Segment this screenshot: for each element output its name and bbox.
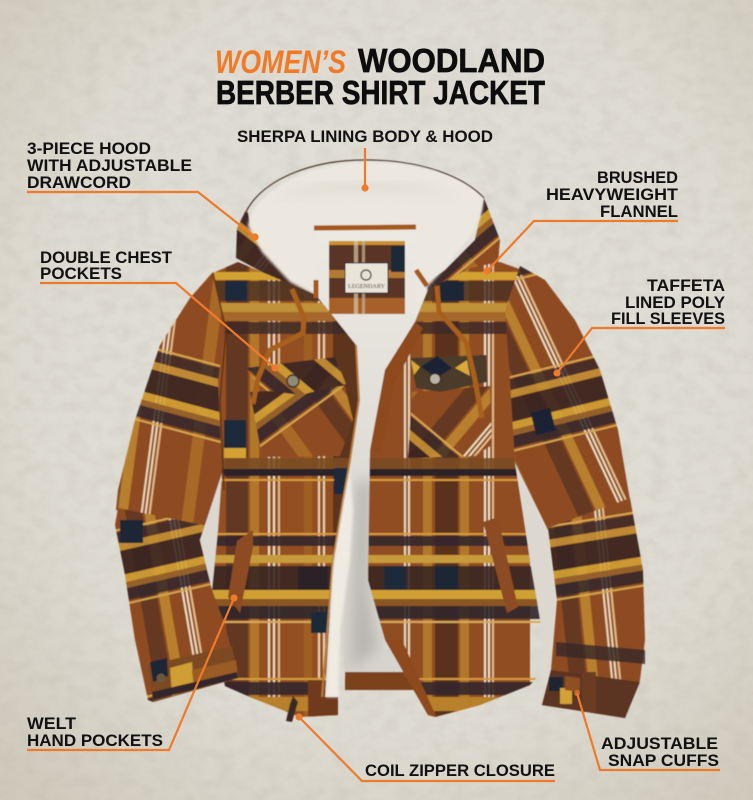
left placket edge: [322, 345, 359, 697]
right sleeve navy check: [531, 408, 556, 435]
right cuff: [542, 670, 640, 718]
sherpa hood lining: [248, 162, 483, 320]
bottom lining band: [345, 672, 420, 690]
callout: sleeves: FILL SLEEVES: [611, 309, 725, 328]
right sleeve upper: [505, 266, 630, 530]
right sleeve lower: [542, 498, 645, 718]
callout: zipper: COIL ZIPPER CLOSURE: [365, 761, 555, 780]
right body panel: [368, 261, 542, 718]
callout: sleeves: TAFFETA: [647, 276, 725, 295]
callout: hood: DRAWCORD: [27, 173, 131, 192]
hanger loop: [314, 227, 416, 228]
callout: flannel: FLANNEL: [600, 202, 678, 221]
callout: cuffs: [574, 690, 720, 770]
callout: hood: WITH ADJUSTABLE: [27, 156, 192, 175]
callout: sleeves: LINED POLY: [625, 293, 726, 312]
left drawcord: [253, 289, 304, 404]
right sleeve lower bands: [556, 642, 645, 664]
zipper pull: [286, 696, 298, 722]
callout: chest pockets: DOUBLE CHEST: [40, 248, 173, 267]
right chest pocket: [408, 355, 492, 458]
callout: cuffs: ADJUSTABLE: [601, 734, 718, 753]
body lining: [316, 232, 420, 680]
callout: sleeves: [553, 276, 726, 377]
left welt pocket: [228, 530, 253, 613]
callout: flannel: BRUSHED: [597, 168, 678, 187]
left sleeve navy check: [120, 520, 143, 543]
sleeve-body gap left: [200, 473, 222, 590]
hood shell left: [236, 208, 318, 298]
callout: chest pockets: [40, 248, 279, 372]
neck patch: [329, 241, 405, 314]
callout: sherpa lining: SHERPA LINING BODY & HOOD: [237, 127, 493, 146]
collar cord ends: [316, 270, 427, 298]
shoulder seam left: [213, 273, 226, 490]
hood top edge: [246, 160, 484, 212]
callout: zipper: [295, 713, 555, 781]
callout: chest pockets: POCKETS: [40, 264, 122, 283]
title: BERBER SHIRT JACKET: [216, 74, 545, 111]
left body panel: [207, 261, 359, 718]
callout: hood: 3-PIECE HOOD: [27, 139, 151, 158]
callout: flannel: [483, 168, 679, 275]
jacket illustration: [115, 160, 645, 725]
hood fur shading: [270, 184, 462, 200]
title: [215, 42, 545, 111]
left chest pocket: [246, 357, 353, 457]
left cuff: [148, 646, 238, 702]
callout: hand pockets: WELT: [27, 714, 77, 733]
right drawcord: [437, 286, 482, 418]
callout: hood: [27, 139, 259, 241]
left cuff snap: [156, 674, 166, 682]
hood shell right: [425, 198, 500, 292]
title: WOODLAND: [358, 42, 545, 79]
sleeve-body gap right: [515, 463, 556, 665]
callout: flannel: HEAVYWEIGHT: [546, 185, 679, 204]
title: WOMEN’S: [215, 44, 347, 80]
callout: cuffs: SNAP CUFFS: [608, 751, 719, 770]
neck patch: LEGENDARY: [348, 284, 386, 290]
right welt pocket: [483, 517, 518, 613]
left sleeve lower: [115, 508, 238, 702]
brand label: [345, 263, 388, 293]
callout: hand pockets: [27, 594, 238, 750]
callout: sherpa lining: [237, 127, 493, 192]
left sleeve upper: [116, 272, 225, 530]
callout: hand pockets: HAND POCKETS: [27, 731, 163, 750]
sherpa strip: [326, 470, 353, 697]
lining shade: [350, 480, 378, 670]
